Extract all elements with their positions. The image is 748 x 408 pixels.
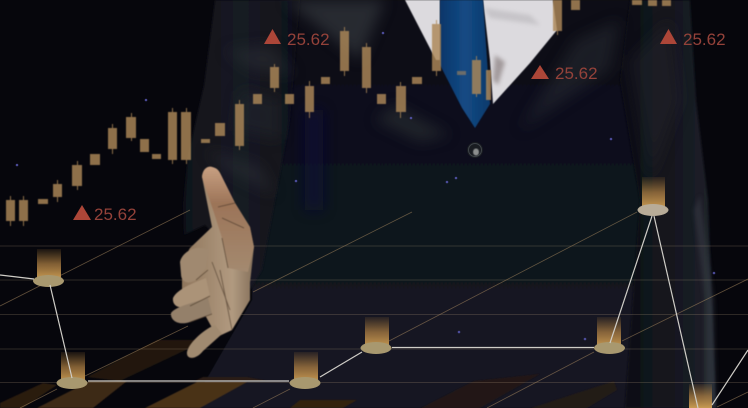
node C: [290, 352, 320, 389]
fingers: [171, 248, 222, 358]
price labels: [73, 29, 726, 224]
node D: [594, 317, 625, 354]
price label 1: 25.62: [287, 30, 330, 49]
man: suit and shirt: [183, 0, 716, 408]
hand: [171, 167, 254, 358]
thumb: [202, 167, 254, 272]
node G: [689, 384, 712, 408]
brown floor stripes: [0, 340, 617, 408]
tie: [440, 0, 490, 128]
price label 1: [264, 29, 330, 49]
navy glow: [305, 110, 323, 210]
palm creases: [190, 203, 244, 330]
node A: [33, 249, 64, 287]
price label 2: [531, 64, 598, 83]
network connections: [0, 216, 748, 408]
button: [467, 142, 483, 158]
shirt: [405, 0, 557, 104]
network nodes: [33, 177, 712, 408]
right arm: [620, 0, 716, 408]
shirt shade: [484, 8, 540, 85]
node F: [638, 177, 668, 216]
candle wicks: [10, 0, 558, 226]
price label 4: 25.62: [94, 205, 137, 224]
node B: [56, 352, 88, 389]
jacket body: [190, 0, 716, 408]
right arm edge: [694, 195, 716, 408]
price label 3: [660, 29, 726, 49]
node E: [360, 317, 392, 354]
price label 2: 25.62: [555, 64, 598, 83]
price label 3: 25.62: [683, 30, 726, 49]
chest folds: [375, 20, 680, 180]
grid lines: [0, 246, 748, 382]
diagonal chart lines: [0, 210, 748, 408]
sparkle dots: [16, 32, 715, 340]
palm and thumb: [182, 167, 254, 337]
candlestick chart: [6, 0, 671, 226]
left sleeve: [183, 0, 300, 290]
sleeve highlights: [205, 0, 385, 195]
price label 4: [73, 205, 137, 224]
